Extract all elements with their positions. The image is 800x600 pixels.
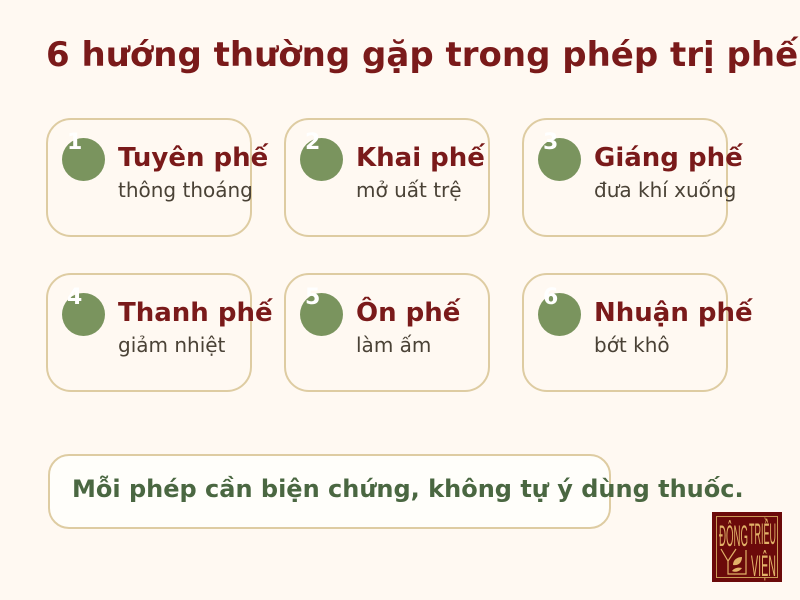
panel: Thanh phế: 4 [67,285,82,310]
panel: Giáng phế: đưa khí xuống [594,178,736,202]
panel: Giáng phế: 3 [543,130,558,155]
panel: Khai phế: mở uất trệ [356,178,462,202]
callout [49,455,744,528]
panel: Nhuận phế: Nhuận phế [594,297,753,328]
panel: Ôn phế: làm ấm [356,333,431,357]
panel: Thanh phế [47,274,273,391]
panel: Khai phế: Khai phế [356,142,485,173]
panel: Giáng phế: Giáng phế [594,142,743,173]
panel: Tuyên phế: thông thoáng [118,178,253,202]
panel: Tuyên phế: 1 [67,130,82,155]
panel: Thanh phế: giảm nhiệt [118,333,226,357]
panel: Nhuận phế: 6 [543,285,558,310]
panel: Nhuận phế [523,274,753,391]
panel: Thanh phế: Thanh phế [118,297,273,328]
panel: Giáng phế [523,119,743,236]
callout: Mỗi phép cần biện chứng, không tự ý dùng thuốc. [72,474,744,503]
logo [712,512,782,583]
title: 6 hướng thường gặp trong phép trị phế [46,35,799,75]
panel: Tuyên phế [47,119,269,236]
panel: Tuyên phế: Tuyên phế [118,142,269,173]
panel: Nhuận phế: bớt khô [594,333,670,357]
panel: Ôn phế: Ôn phế [356,296,461,328]
panel: Ôn phế [285,274,489,391]
panel: Khai phế: 2 [305,130,320,155]
panel: Ôn phế: 5 [305,285,320,310]
panel: Khai phế [285,119,489,236]
